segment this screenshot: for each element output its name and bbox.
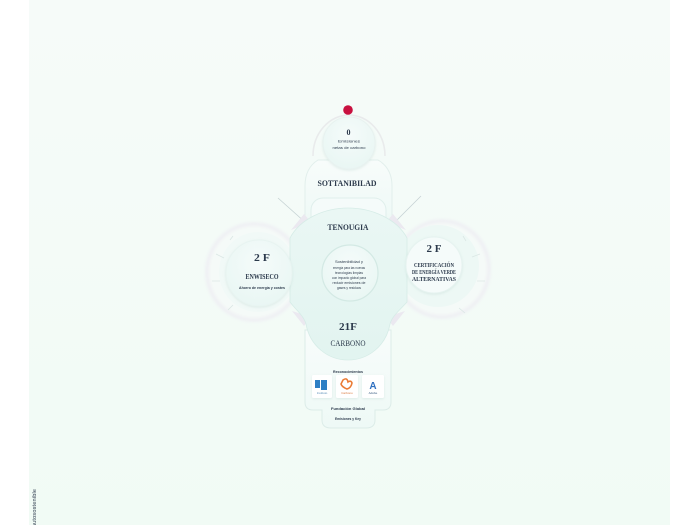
inner circle with paragraph: tecnologías limpias <box>335 271 363 275</box>
decorative joints <box>291 214 406 326</box>
arch above top circle <box>313 115 385 156</box>
bottom metric: 21F <box>339 322 357 333</box>
logo card 3 <box>362 375 384 398</box>
logo card 2: Carbono <box>341 391 353 395</box>
bottom panel <box>305 330 391 428</box>
red marker dot <box>343 105 353 115</box>
description <box>412 261 456 283</box>
heading: sostenibilidad: SOTTANIBILAD <box>318 178 376 188</box>
inner circle with paragraph: gases y residuos <box>337 286 361 290</box>
right satellite halo <box>395 221 489 317</box>
inner circle with paragraph: Sostenibilidad y <box>335 260 363 264</box>
left circle <box>226 240 292 306</box>
connector line right <box>392 196 421 225</box>
caption line two: netas de carbono <box>332 146 366 150</box>
logo card 1: Instituto <box>317 391 328 395</box>
description: CERTIFICACIÓN <box>414 261 454 269</box>
central body <box>290 208 407 360</box>
footer line one: Fundación Global <box>331 406 365 411</box>
top circle <box>323 117 375 169</box>
connector line left <box>278 198 306 223</box>
inner panel behind central body <box>311 198 386 238</box>
metric: 0 <box>346 128 350 137</box>
right circle <box>406 237 462 293</box>
inner circle with paragraph: reducir emisiones de <box>332 281 366 285</box>
heading: tecnología: TENOUGIA <box>328 223 369 232</box>
heading: carbono: CARBONO <box>330 338 366 348</box>
footer line two: Emisiones y Key <box>335 416 362 421</box>
inner circle with paragraph: energía para las nuevas <box>333 266 365 270</box>
logo card 3: A <box>369 381 377 392</box>
caption line one: Emisiones <box>338 140 360 144</box>
top panel <box>305 160 392 222</box>
metric: 2 F <box>426 243 442 255</box>
inner circle with paragraph <box>322 245 378 301</box>
inner circle with paragraph: con impacto global para <box>332 276 367 280</box>
description: DE ENERGÍA VERDE <box>412 268 456 276</box>
metric: 2 F <box>254 252 270 264</box>
description: Ahorro de energía y costes <box>239 285 286 290</box>
left satellite halo <box>207 224 301 320</box>
label: ENWISECO <box>246 273 279 281</box>
logo card 3: Adobe <box>369 391 378 395</box>
description: ALTERNATIVAS <box>412 276 456 283</box>
label above logos: Reconocimientos <box>333 369 364 374</box>
